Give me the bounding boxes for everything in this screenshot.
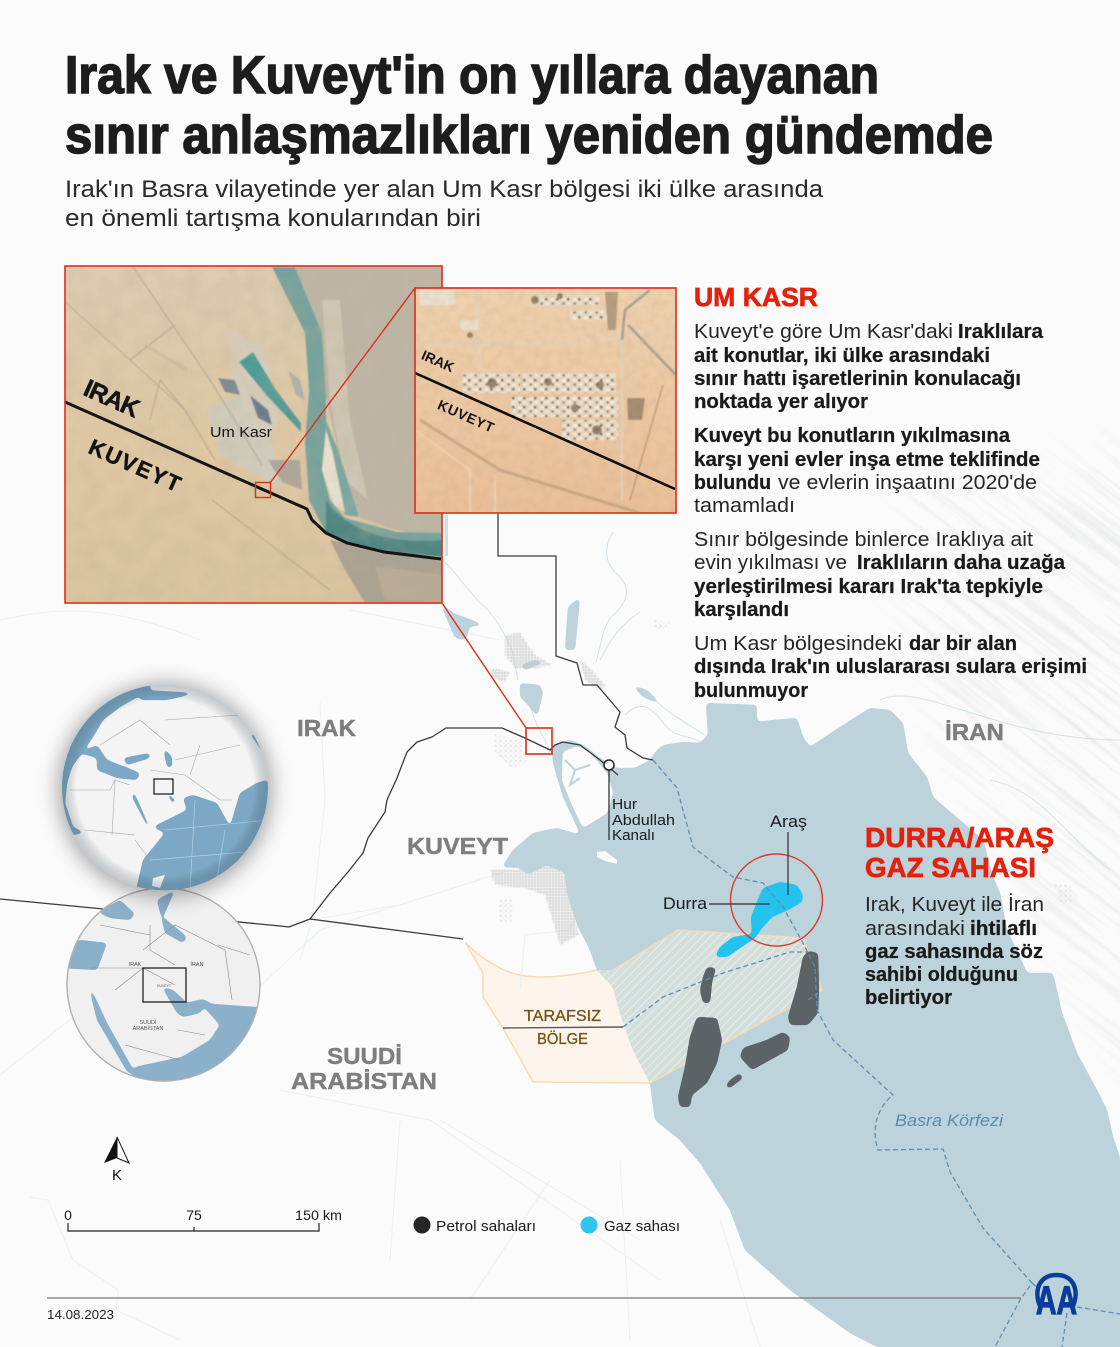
label: KUVEYT: KUVEYT — [435, 396, 497, 436]
text block: Um Kasr: yerleştirilmesi kararı Irak'ta tepkiyle — [694, 576, 1043, 598]
subtitle: en önemli tartışma konularından biri — [65, 205, 481, 232]
callout: Araş — [770, 812, 807, 895]
oil fields — [678, 951, 819, 1107]
locator box — [143, 968, 186, 1002]
texture overlay — [162, 281, 434, 554]
callout: Hur Abdullah: Hur — [612, 796, 637, 813]
text block: Durra/Araş: gaz sahasında söz — [865, 941, 1043, 963]
text block: Um Kasr: ait konutlar, iki ülke arasındaki — [694, 345, 990, 367]
roads — [415, 290, 655, 500]
text block: Um Kasr: karşı yeni evler inşa etme teklifinde — [694, 449, 1040, 471]
label: Um Kasr: Um Kasr — [210, 424, 272, 441]
title: sınır anlaşmazlıkları yeniden gündemde — [65, 106, 993, 165]
panel: detail satellite view — [415, 288, 676, 513]
roads — [65, 267, 330, 590]
sea label: Basra Körfezi — [895, 1111, 1004, 1130]
text block: Um Kasr — [694, 321, 1087, 702]
logo: AA: AA — [1036, 1279, 1077, 1323]
text block: Um Kasr: noktada yer alıyor — [694, 391, 868, 413]
globe labels: IRAK — [129, 962, 142, 968]
building blocks — [463, 373, 520, 393]
vegetation specks — [467, 293, 604, 435]
gas field — [715, 882, 803, 957]
text block: Um Kasr: tamamladı — [694, 495, 795, 517]
text block: Durra/Araş: Irak, Kuveyt ile İran — [865, 893, 1044, 916]
scale bar — [64, 1207, 342, 1231]
callout: Araş: Araş — [770, 812, 807, 831]
zoom leader — [270, 288, 415, 483]
borders — [0, 513, 653, 939]
country labels: SUUDİ — [327, 1043, 402, 1069]
neutral zone dividing line — [503, 1027, 623, 1028]
city patches — [490, 620, 1078, 945]
heading: Durra/Araş: GAZ SAHASI — [865, 852, 1036, 883]
text block: Um Kasr: Sınır bölgesinde binlerce Iraklıya ait — [694, 529, 1033, 551]
globe labels: İRAN — [190, 961, 204, 968]
text block: Um Kasr: karşılandı — [694, 599, 789, 621]
scale bar: 150 km — [295, 1207, 342, 1223]
roads and rivers — [0, 610, 760, 1347]
hatched offshore zone — [597, 930, 822, 1083]
date: 14.08.2023 — [47, 1307, 114, 1322]
callout: Hur Abdullah: Abdullah — [612, 812, 675, 829]
globe labels: ARABİSTAN — [133, 1025, 163, 1032]
label: IRAK: IRAK — [419, 347, 457, 375]
text block: Um Kasr: Kuveyt bu konutların yıkılmasına — [694, 425, 1011, 447]
red locator box and leader — [442, 603, 552, 754]
title — [65, 46, 993, 165]
text block: Durra/Araş: arasındaki — [865, 918, 965, 940]
title: Irak ve Kuveyt'in on yıllara dayanan — [65, 46, 879, 105]
country labels: KUVEYT — [407, 833, 508, 859]
panel: satellite view Um Kasr — [65, 266, 442, 603]
text block: Um Kasr: dar bir alan — [909, 633, 1017, 655]
text block: Um Kasr: Um Kasr bölgesindeki — [694, 633, 902, 655]
scale bar: 0 — [64, 1207, 72, 1223]
text block: Durra/Araş — [865, 893, 1044, 1009]
texture overlay — [423, 289, 657, 504]
label: KUVEYT: KUVEYT — [85, 434, 185, 497]
logo: AA — [1036, 1275, 1077, 1323]
neutral zone label: TARAFSIZ — [524, 1008, 601, 1025]
country labels: ARABİSTAN — [291, 1068, 437, 1094]
text block: Um Kasr: evin yıkılması ve — [694, 552, 847, 574]
text block: Um Kasr: bulunmuyor — [694, 680, 808, 702]
north arrow: K — [112, 1167, 122, 1184]
maritime boundaries — [623, 760, 1120, 1347]
text block: Um Kasr: sınır hattı işaretlerinin konulacağı — [694, 368, 1021, 390]
legend: Gaz sahası — [604, 1218, 680, 1235]
terrain: Iran ridges — [916, 464, 1120, 998]
border line — [65, 402, 441, 559]
border line — [415, 373, 675, 489]
heading: Durra/Araş — [865, 822, 1054, 883]
globe labels — [129, 961, 204, 1032]
Bubiyan island — [562, 746, 613, 828]
country labels: İRAN — [945, 719, 1004, 745]
country labels: IRAK — [297, 715, 356, 741]
text block: Durra/Araş: belirtiyor — [865, 987, 952, 1009]
legend — [414, 1216, 680, 1235]
text block: Durra/Araş: sahibi olduğunu — [865, 964, 1018, 986]
lakes — [442, 597, 662, 717]
map — [0, 464, 1120, 1347]
text block: Um Kasr: Kuveyt'e göre Um Kasr'daki — [694, 321, 953, 343]
globe: world — [40, 680, 280, 896]
callout: Hur Abdullah: Kanalı — [612, 827, 655, 844]
heading: Um Kasr: UM KASR — [694, 282, 818, 312]
neutral zone land — [465, 942, 650, 1083]
text block: Um Kasr: bulundu — [694, 472, 771, 494]
east mudflats — [295, 266, 442, 540]
highlight circle — [730, 854, 822, 946]
legend: Petrol sahaları — [436, 1218, 536, 1235]
sea: Persian Gulf — [502, 703, 1120, 1347]
town — [206, 395, 280, 490]
callout: Hur Abdullah — [604, 760, 675, 844]
callout: Durra — [663, 894, 770, 913]
label: IRAK: IRAK — [79, 374, 144, 423]
globe: regional — [60, 888, 270, 1085]
locator box — [154, 779, 173, 794]
text block: Um Kasr: Iraklılara — [958, 321, 1044, 343]
neutral zone label: BÖLGE — [537, 1030, 588, 1048]
footer rule — [47, 1297, 1021, 1299]
frame — [415, 288, 676, 513]
callout: Durra: Durra — [663, 894, 708, 913]
frame — [65, 266, 442, 603]
text block: Um Kasr: dışında Irak'ın uluslararası sulara erişimi — [694, 656, 1087, 678]
subtitle: Irak'ın Basra vilayetinde yer alan Um Kasr bölgesi iki ülke arasında — [65, 176, 823, 203]
Failaka island — [597, 851, 617, 864]
subtitle — [65, 176, 823, 232]
heading: Durra/Araş: DURRA/ARAŞ — [865, 822, 1054, 853]
scale bar: 75 — [186, 1207, 202, 1223]
country labels — [291, 715, 1004, 1094]
river — [272, 267, 442, 557]
neutral zone label — [524, 1008, 601, 1048]
dock inlet — [239, 352, 301, 432]
globe labels: SUUDİ — [139, 1019, 157, 1026]
north arrow — [104, 1137, 129, 1184]
text block: Durra/Araş: ihtilaflı — [970, 918, 1037, 940]
text block: Um Kasr: Iraklıların daha uzağa — [857, 552, 1066, 574]
globe labels: KUVEYT — [157, 984, 172, 988]
text block: Um Kasr: ve evlerin inşaatını 2020'de — [778, 472, 1037, 494]
